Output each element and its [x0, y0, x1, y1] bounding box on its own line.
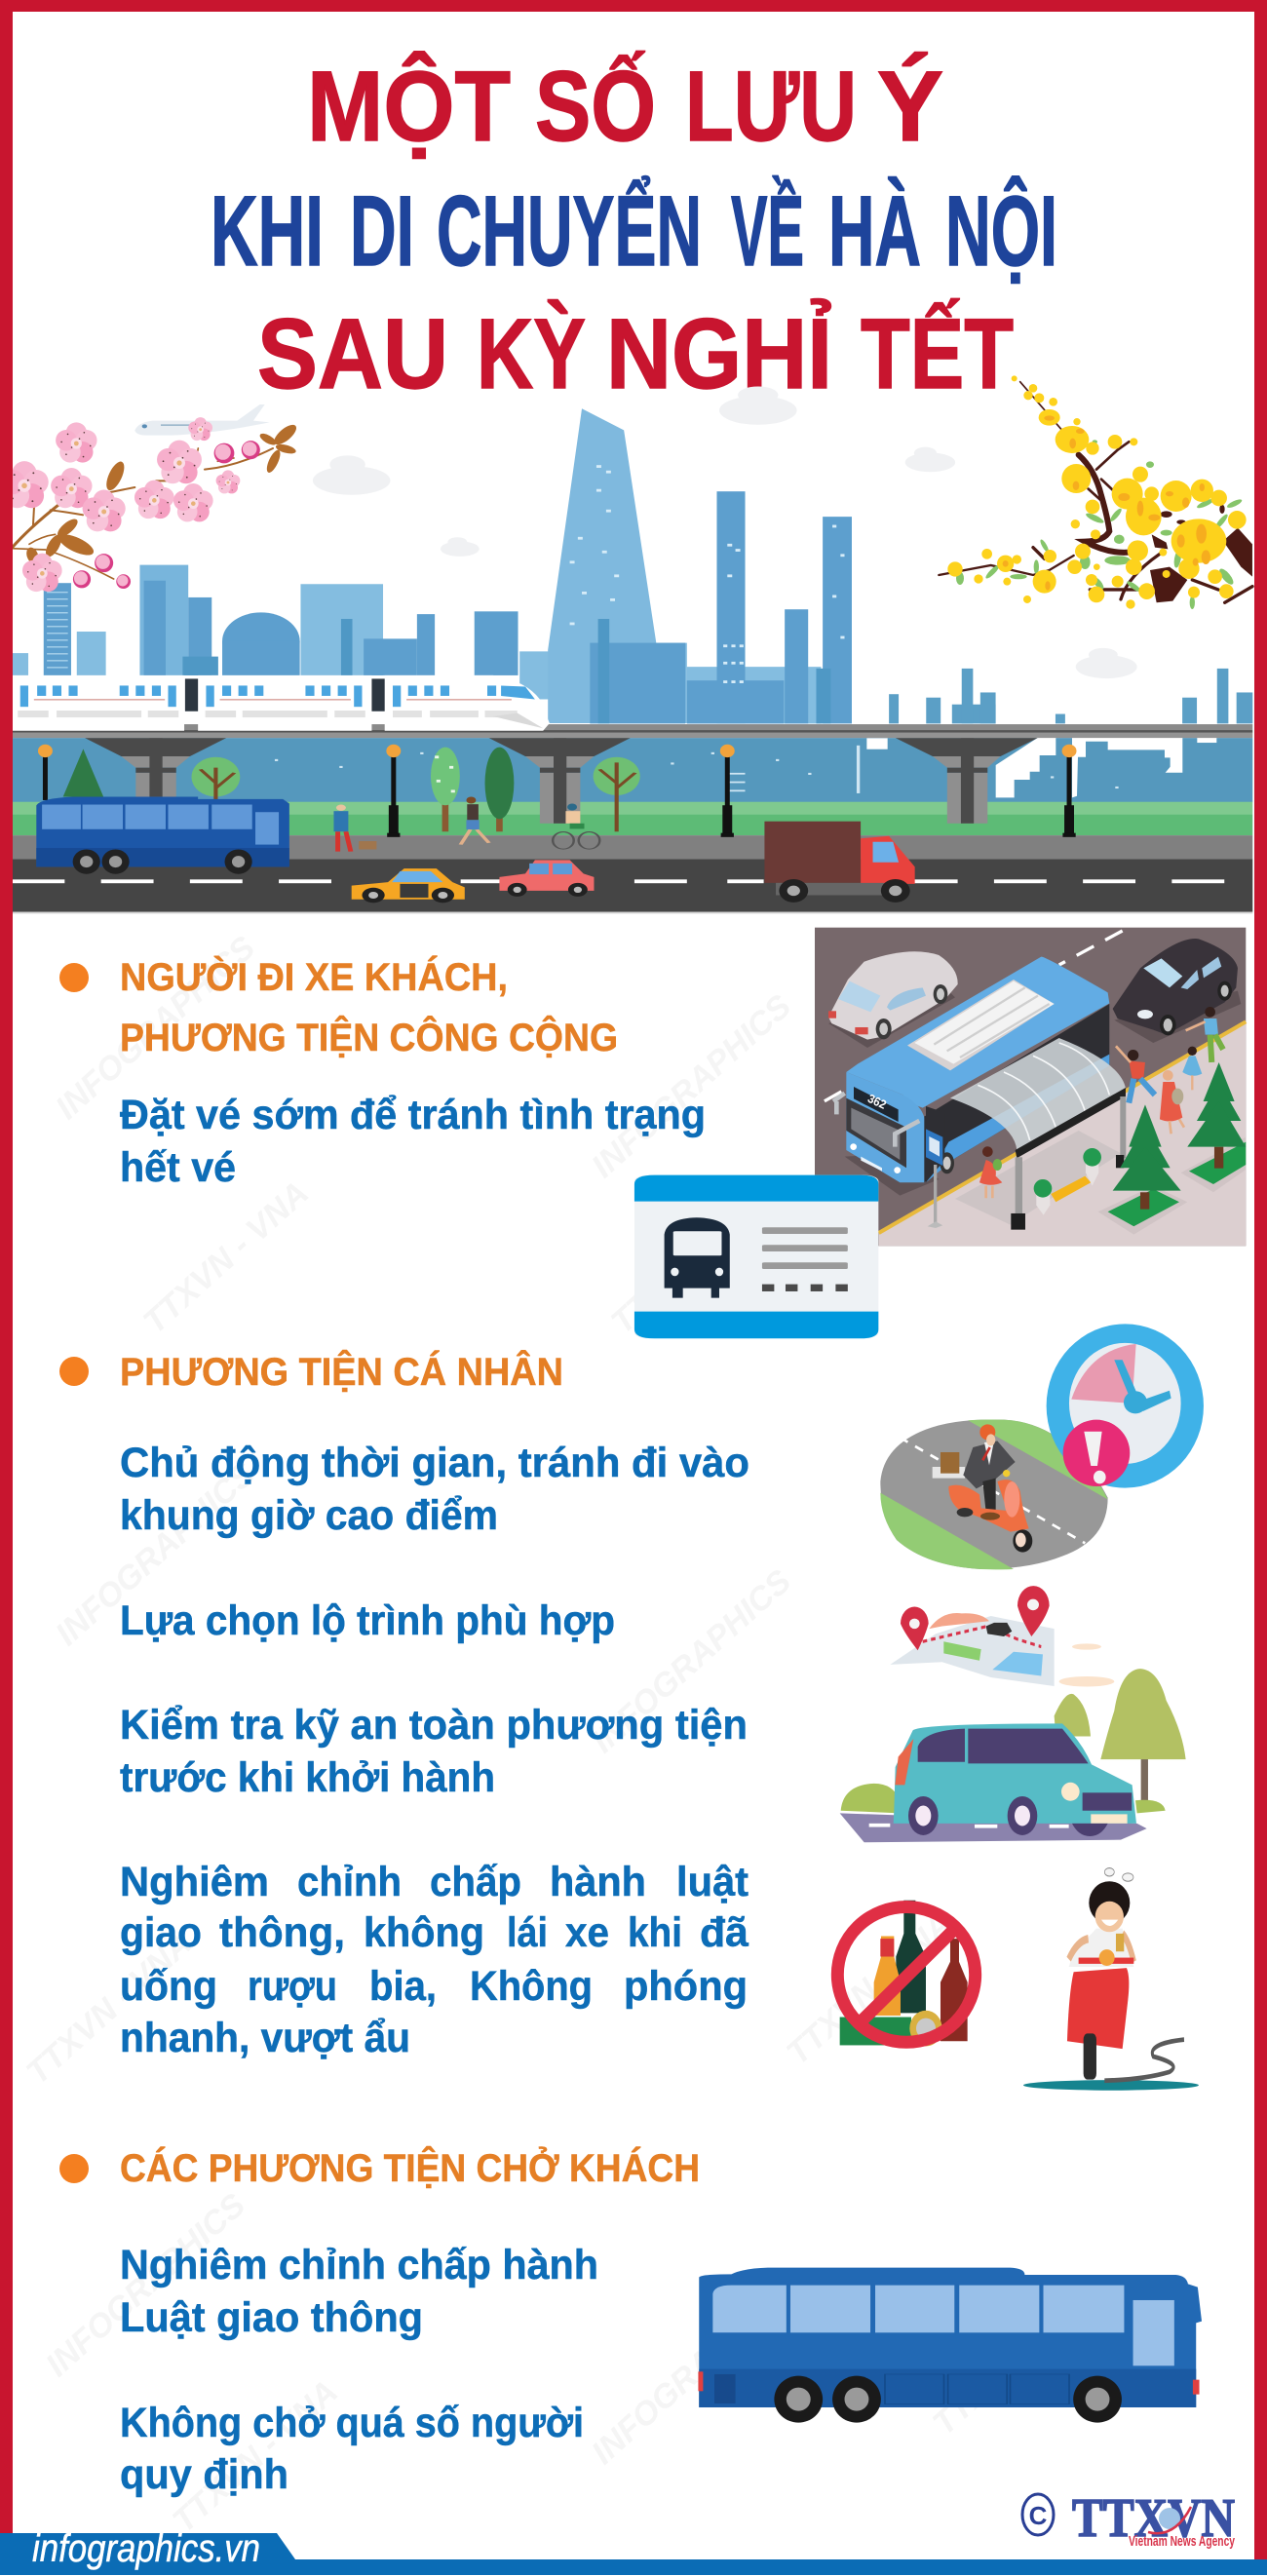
blossoms: [947, 375, 1247, 609]
illustration: scooter rider on road: [880, 1419, 1108, 1569]
section 2 tip: traffic law: lái: [507, 1909, 548, 1956]
logo globe: [1148, 2507, 1191, 2533]
viaduct deck: [12, 724, 1252, 738]
shelter: [950, 1038, 1126, 1230]
section 2 bullet: [59, 1357, 89, 1386]
section 2 heading: PHƯƠNG TIỆN CÁ NHÂN: [120, 1349, 563, 1394]
hero city scene: [12, 386, 1252, 913]
grass: [12, 802, 1252, 835]
section 2 tip: traffic law: [120, 1859, 749, 2061]
bottles: [840, 1901, 968, 2046]
blue bus: [833, 957, 1109, 1196]
section 2 tip: time: khung giờ cao điểm: [120, 1492, 498, 1539]
illustration: bus stop: [815, 928, 1246, 1246]
passengers: [979, 1007, 1223, 1198]
bus: [36, 796, 289, 874]
logo wordmark: TTXVN: [1072, 2488, 1235, 2549]
section 2 tip: traffic law: xe: [565, 1909, 609, 1956]
section 2 tip: traffic law: khi: [628, 1909, 682, 1956]
watermarks: TTXVN - VNA: [780, 1905, 959, 2072]
skyline: [12, 408, 1252, 723]
trees: [63, 748, 640, 831]
title line 2: CHUYỂN: [437, 175, 702, 287]
section 3 tip: passenger limit: quy định: [120, 2451, 288, 2498]
runner: [461, 796, 489, 845]
bus icon: [665, 1217, 730, 1298]
illustration: teal car with trees: [840, 1669, 1186, 1842]
footer bar: [0, 2527, 1267, 2575]
sidewalk: [879, 1021, 1246, 1246]
watermarks: INFOGRAPHICS: [39, 2186, 252, 2384]
section 2 tip: time: [120, 1440, 749, 1539]
road: [815, 928, 1246, 1246]
section 1 heading: [120, 954, 618, 1059]
section 2 tip: traffic law: Nghiêm: [120, 1859, 269, 1905]
red car: [499, 860, 594, 897]
route number: 362: [865, 1092, 888, 1112]
title line 2: HÀ: [828, 175, 921, 287]
section 2 tip: traffic law: thông,: [219, 1909, 345, 1956]
title line 1: MỘT: [307, 51, 511, 162]
title line 2: KHI: [211, 175, 324, 287]
pavement: [12, 835, 1252, 859]
airplane: [134, 404, 270, 436]
title: [211, 51, 1057, 409]
alert badge: [1063, 1420, 1130, 1486]
watermarks: INFOGRAPHICS: [585, 2274, 798, 2472]
footer site name: infographics.vn: [32, 2527, 260, 2570]
section 1 body text: Đặt vé sớm để tránh tình trạng: [120, 1092, 706, 1138]
section 2 tip: traffic law: không: [364, 1909, 484, 1956]
leaves: [956, 440, 1243, 609]
silver car: [828, 951, 958, 1048]
section 3 tip: passenger limit: [120, 2400, 584, 2498]
truck: [764, 822, 915, 903]
section 3 tip: traffic law: [120, 2242, 598, 2341]
section 2 tip: traffic law: rượu: [248, 1963, 337, 2010]
title line 2: DI: [350, 175, 414, 287]
title line 2: NỘI: [945, 175, 1057, 287]
building windows: [570, 465, 845, 683]
section 1 heading: NGƯỜI ĐI XE KHÁCH,: [120, 954, 508, 999]
illustration: drunk scooter rider: [1023, 1868, 1199, 2091]
bus stop sign: [926, 1129, 942, 1228]
watermarks: TTXVN - VNA: [19, 1925, 199, 2092]
section 3 tip: traffic law: Luật giao thông: [120, 2294, 423, 2341]
street lamps: [38, 745, 1076, 837]
section 1 body text: hết vé: [120, 1144, 236, 1191]
lower skyline band: [12, 738, 1252, 802]
title line 2: [211, 175, 1057, 287]
title line 1: Ý: [877, 51, 943, 162]
section 2 tip: vehicle check: [120, 1702, 748, 1801]
title line 3: KỲ: [477, 298, 586, 409]
watermarks: [19, 929, 1105, 2540]
watermarks: INFOGRAPHICS: [49, 929, 262, 1127]
clouds: [313, 386, 1137, 678]
section 2 tip: traffic law: uống: [120, 1963, 217, 2010]
cyclist: [553, 803, 599, 849]
rider: [933, 1424, 1032, 1553]
copyright mark: C: [1029, 2501, 1048, 2530]
section 2 tip: traffic law: đã: [700, 1909, 749, 1956]
watermarks: TTXVN - VNA: [926, 2276, 1105, 2442]
title line 3: NGHỈ: [606, 298, 832, 409]
section 2 tip: traffic law: hành: [550, 1859, 646, 1905]
viaduct piers: [85, 738, 1038, 824]
title line 3: [257, 298, 1014, 409]
section 3 tip: passenger limit: Không chở quá số người: [120, 2400, 584, 2446]
roof panel: [907, 980, 1055, 1070]
title line 2: VỀ: [731, 175, 804, 287]
section 2 tip: traffic law: chỉnh: [297, 1859, 402, 1905]
section 2 tip: traffic law: luật: [676, 1859, 749, 1905]
title line 1: LƯU: [685, 51, 857, 162]
section 2 tip: traffic law: giao: [120, 1909, 202, 1956]
TTXVN logo: [1022, 2488, 1235, 2550]
watermarks: INFOGRAPHICS: [49, 1455, 262, 1653]
pine tree planters: [1098, 1137, 1246, 1235]
bench and planters: [1034, 1148, 1101, 1215]
illustration: coach bus: [698, 2268, 1202, 2423]
illustration: bus ticket: [634, 1175, 878, 1338]
watermarks: TTXVN - VNA: [136, 1174, 316, 1341]
section 2 tip: vehicle check: Kiểm tra kỹ an toàn phương tiện: [120, 1702, 748, 1749]
prohibition ring: [837, 1907, 976, 2042]
wheels: [774, 2376, 1122, 2423]
section 2 tip: time: Chủ động thời gian, tránh đi vào: [120, 1440, 749, 1486]
title line 3: SAU: [257, 298, 448, 409]
section 3 heading: CÁC PHƯƠNG TIỆN CHỞ KHÁCH: [120, 2145, 700, 2190]
section 2 tip: traffic law: Không: [470, 1963, 593, 2010]
section 1 body text: [120, 1092, 706, 1191]
section 2 tip: traffic law: bia,: [369, 1963, 437, 2010]
section 2 tip: traffic law: nhanh, vượt ẩu: [120, 2015, 410, 2061]
dark car: [1113, 939, 1241, 1043]
illustration: route map: [890, 1586, 1114, 1687]
cherry blossom branch: [0, 417, 299, 592]
pine trees: [1113, 1062, 1246, 1210]
watermarks: INFOGRAPHICS: [585, 987, 798, 1185]
section 1 bullet: [59, 963, 89, 992]
walker with dog: [333, 805, 376, 852]
map pins: [901, 1586, 1050, 1650]
watermarks: TTXVN - VNA: [166, 2373, 345, 2540]
blossoms: [0, 417, 260, 592]
title line 1: [307, 51, 943, 162]
copyright mark: [1022, 2494, 1054, 2535]
title line 1: SỐ: [535, 51, 656, 162]
watermarks: TTXVN - VNA: [604, 1174, 784, 1341]
section 2 tip: vehicle check: trước khi khởi hành: [120, 1754, 495, 1801]
section 2 tip: traffic law: phóng: [624, 1963, 748, 2010]
taxi: [352, 868, 465, 903]
apricot blossom branch: [939, 375, 1252, 609]
section 3 tip: traffic law: Nghiêm chỉnh chấp hành: [120, 2242, 598, 2288]
illustration: no alcohol sign: [837, 1901, 976, 2046]
train: [12, 675, 550, 731]
pedestrians: [333, 796, 599, 852]
illustration: clock with alert: [1047, 1324, 1204, 1488]
road: [12, 859, 1252, 913]
section 2 tip: route: Lựa chọn lộ trình phù hợp: [120, 1597, 615, 1644]
section 2 tip: traffic law: chấp: [430, 1859, 521, 1905]
section 3 bullet: [59, 2154, 89, 2183]
title line 3: TẾT: [861, 298, 1014, 409]
section 1 heading: PHƯƠNG TIỆN CÔNG CỘNG: [120, 1015, 618, 1059]
watermarks: INFOGRAPHICS: [585, 1562, 798, 1760]
